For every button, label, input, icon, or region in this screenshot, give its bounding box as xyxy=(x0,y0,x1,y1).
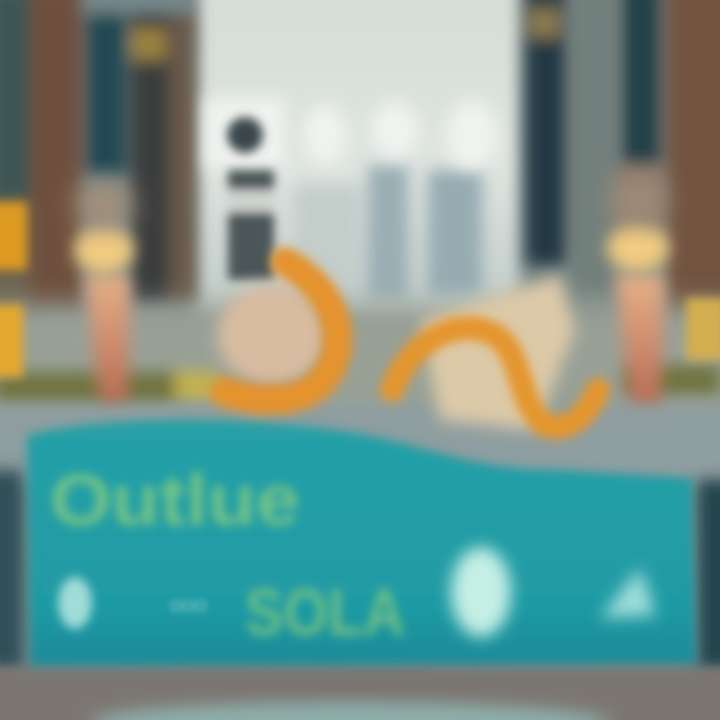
left shrimp xyxy=(217,262,337,400)
lower street band xyxy=(0,405,720,485)
dark tower with panda pattern xyxy=(227,117,274,280)
side dark strips xyxy=(0,470,720,670)
right torch xyxy=(607,178,669,410)
label text: SOLA xyxy=(245,575,405,649)
distant skyline xyxy=(295,165,482,300)
heading text: Outlue xyxy=(50,461,300,541)
icon: right triangle xyxy=(600,568,656,618)
blurred white lettering xyxy=(205,98,498,169)
street foliage xyxy=(0,365,720,404)
right buildings xyxy=(526,0,720,320)
small label: ooo xyxy=(170,592,207,617)
left buildings xyxy=(0,0,196,330)
right shrimp xyxy=(392,275,598,430)
bottom floor xyxy=(0,668,720,720)
teal banner xyxy=(27,420,696,666)
icon: centre capsule xyxy=(451,547,511,637)
left torch xyxy=(74,183,134,405)
orange side lights xyxy=(0,202,720,377)
sky xyxy=(195,0,520,320)
icon: left round xyxy=(58,577,92,629)
street band xyxy=(0,305,720,430)
